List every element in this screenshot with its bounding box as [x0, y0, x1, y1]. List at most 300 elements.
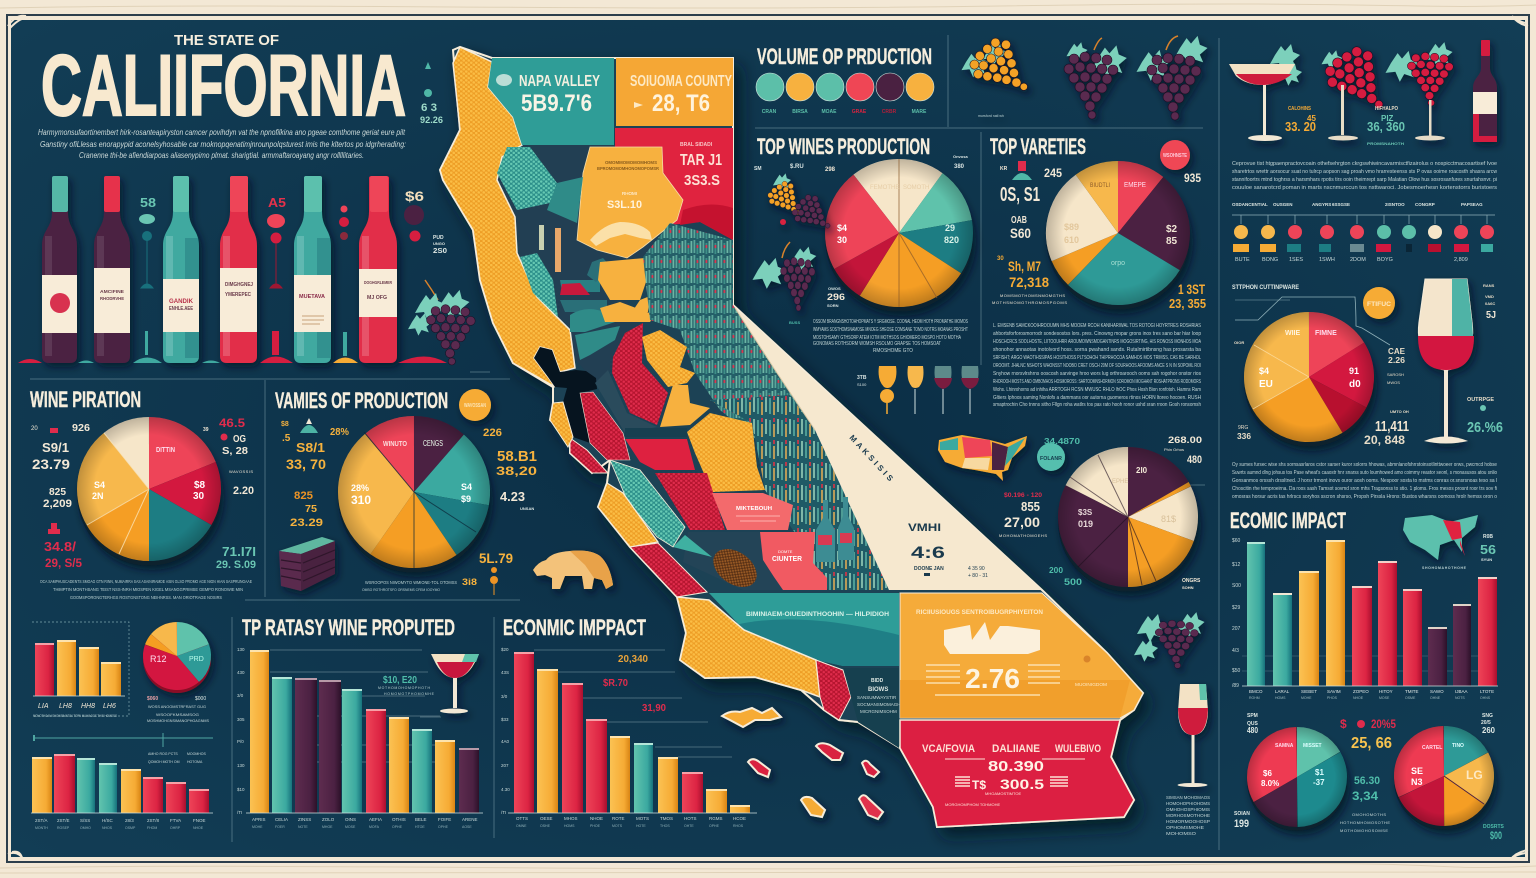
region: red county: BRAL SIDADI — [680, 142, 713, 148]
bottle 2 — [94, 176, 130, 363]
stats: MWOS — [1387, 380, 1400, 385]
pie chart: WIIE — [1285, 330, 1300, 337]
bar chart: OINS — [345, 817, 356, 822]
left labels: Onvosa — [953, 154, 968, 159]
region: slate band — [595, 370, 657, 433]
bar chart: eight bars: FHOM — [147, 826, 157, 830]
stats: SAROSH — [1387, 372, 1404, 377]
region: red block with stats — [900, 720, 1134, 827]
bar chart: eight bars: 2ST/8 — [147, 818, 160, 823]
stats: 20, 848 — [1364, 433, 1405, 447]
text block: SIMSAN MOHOMAOS — [1166, 795, 1210, 800]
title block — [38, 32, 443, 160]
intro paragraph: Ganstiny ofiLlesas enorapypid aconelsyhosable car moknopqenatimjnrounpolqsturest imis the kltertos po idgrherading: — [40, 139, 407, 149]
map bottles — [816, 497, 854, 562]
left stats: S9/1 — [42, 440, 69, 455]
bar chart: BELE — [415, 817, 427, 822]
region: yellow block: RICIIUSIOUGS SENTROIBUGRPHIYEITON — [916, 609, 1043, 616]
region: dark text block: BIDD — [871, 678, 884, 684]
pie chart: d0 — [1349, 379, 1361, 390]
bar chart: MOHE — [1301, 696, 1312, 700]
pie chart: 28% — [351, 483, 369, 493]
bottle 4: YMEREPEC — [225, 292, 251, 298]
timeline legend: CONGRP — [1415, 202, 1435, 207]
bottle 2: AMCIFINE — [100, 289, 124, 294]
bar chart: 130 — [237, 763, 245, 768]
bar chart: eight bars: S/SS — [80, 818, 90, 823]
bar chart: MOTS — [636, 816, 649, 821]
icon: grape cluster by bottles — [408, 280, 475, 365]
bottle 3: GANDIK — [169, 299, 194, 305]
bar chart: FOIFE — [438, 817, 451, 822]
pie chart: right: LG — [1466, 768, 1483, 782]
region: salmon block south — [760, 532, 827, 590]
bar chart: $20 — [501, 647, 509, 652]
swatch labels: MARE — [912, 109, 927, 115]
bar chart — [1232, 538, 1498, 700]
icon: US map multicolour — [938, 435, 1027, 481]
main title: CALIIFORNIA — [41, 38, 406, 134]
text block — [1166, 795, 1210, 836]
islands — [722, 708, 883, 819]
bar chart: four bars: LIA — [38, 703, 49, 710]
bar chart: eight bars: OHRP — [170, 826, 181, 830]
bar chart: $12 — [1232, 562, 1241, 568]
map base — [440, 47, 1143, 827]
bar chart: $10 — [237, 787, 245, 792]
value labels: 31,90 — [642, 703, 666, 714]
pie chart: EMEPE — [1124, 182, 1146, 189]
pie chart: $3S — [1078, 508, 1093, 517]
right stats: 226 — [483, 427, 502, 439]
badge: WAVOSSAN — [464, 403, 486, 409]
bar chart: 430 — [237, 670, 245, 675]
bar chart: HCOE — [733, 816, 746, 821]
stats — [1234, 283, 1503, 447]
stats: 245 — [1044, 166, 1062, 180]
bar chart: four bars: MONOTHOAM SHOWSIMATOA TOPN MAIHAOGS THIS HOMOSO — [33, 714, 117, 718]
bar chart: $33 — [501, 717, 509, 722]
text block: RMOSHOME GTO — [873, 348, 913, 354]
region: Napa Valley: 5B9.7'6 — [521, 90, 592, 117]
stats: Phin Orhos — [1164, 447, 1184, 452]
left labels: 298 — [825, 167, 836, 173]
right stats: UNSAN — [520, 506, 534, 511]
bar chart: eight bars: HOTOMA — [187, 760, 203, 764]
bar chart: $50 — [1232, 668, 1241, 674]
badge: WSOHNSTE — [1163, 153, 1188, 159]
bar chart: eight bars: H/SC — [102, 818, 114, 823]
pie chart: $4 — [837, 223, 847, 233]
pie chart — [338, 416, 490, 573]
timeline legend: 6SSGSE — [1332, 202, 1350, 207]
pie chart: $8 — [194, 480, 206, 491]
stats: 1 3ST — [1178, 281, 1205, 297]
region: dark text block — [843, 668, 901, 748]
bar chart: eight bars: QOMOH MOTH OM — [148, 760, 180, 764]
bar chart: TMOS — [660, 816, 673, 821]
stats: 23, 355 — [1169, 296, 1206, 311]
bottle 6 — [359, 176, 397, 363]
bar chart: FOER — [275, 825, 285, 829]
bar chart: SIEBET — [1301, 689, 1317, 694]
region: Napa Valley: NAPA VALLEY — [519, 73, 600, 90]
pie chart: 81$ — [1161, 514, 1176, 524]
left stats: 23.29 — [290, 517, 323, 529]
yellow patches — [598, 258, 655, 322]
region: yellow dotted central — [642, 330, 695, 387]
icon: golden grapes: mursford natl wh — [978, 114, 1004, 118]
caption: WSROOPOS NIWOMYTO WMIONE-TOL OTOMSS — [365, 580, 457, 585]
pie chart: S4 — [94, 480, 105, 490]
bar chart: ZOPEO — [1353, 689, 1369, 694]
bar chart: MHOE — [322, 825, 333, 829]
bottle stats: 58 — [140, 195, 156, 210]
stripes: slate and teal terraces — [560, 258, 620, 360]
region: cream triangle: 4:6 — [911, 543, 945, 562]
region: dark text block: SANSUMWAYSTIR — [857, 695, 897, 700]
pie chart: $9 — [461, 494, 471, 504]
icon: four small glasses: 3TB — [857, 375, 867, 381]
pie chart: CENGS — [423, 439, 443, 448]
stats: OIOR — [1234, 340, 1244, 345]
pie chart: right — [1394, 726, 1494, 830]
pie chart: orpo — [1111, 260, 1125, 267]
pie chart: 820 — [944, 235, 959, 245]
stats: 500 — [1064, 577, 1082, 587]
region: yellow block: MUOINIGDOM — [1075, 682, 1107, 687]
wine bottle row — [18, 176, 447, 363]
right stats: 5L.79 — [479, 550, 513, 566]
left labels: $.RU — [790, 164, 804, 170]
region: bay — [534, 347, 597, 443]
bar chart: four bars: LH6 — [103, 703, 116, 710]
pie chart: left — [1247, 727, 1347, 831]
map stat: SYUN — [1481, 557, 1492, 562]
value labels: $R.70 — [603, 678, 628, 689]
region: yellow county with bear silhouette — [577, 147, 683, 258]
stats — [1234, 713, 1504, 842]
region: dark text block: BIOWS — [868, 687, 888, 693]
title kicker: THE STATE OF — [174, 32, 279, 49]
stats: 25, 66 — [1351, 735, 1392, 752]
left labels: 380 — [954, 164, 965, 170]
bar chart: /TI — [501, 810, 506, 815]
panel: center-right pie with US map — [938, 435, 1210, 836]
region: yellow plain — [660, 385, 710, 427]
text block: GONOMAS ROTHSORM WOMSH RSOLMO GRAPSE TOS HOMSOAT — [813, 341, 941, 347]
bar chart: HOTS — [684, 816, 697, 821]
stats: MOTHOMOHOSOMSE — [1340, 828, 1388, 833]
bar chart: 3/0 — [501, 694, 508, 699]
stats: 0A6C — [1485, 301, 1495, 306]
stats: $ — [1340, 717, 1347, 731]
panel: small charts bottom left — [31, 622, 213, 830]
stats: SPM — [1247, 713, 1258, 719]
bar chart: PHOE — [590, 824, 601, 828]
bar chart: four bars: LH8 — [59, 703, 72, 710]
pie chart: left: 8.0% — [1261, 779, 1279, 788]
stats: 20/5 — [1481, 720, 1491, 726]
pie chart: $4 — [1259, 366, 1269, 376]
icon: crate — [279, 537, 335, 591]
bar chart: MOHE — [252, 825, 263, 829]
caption: OMSO ROTHROTSFO ORSNEMS CFEM IOOYMO — [362, 587, 440, 592]
pie chart — [1046, 161, 1190, 310]
pie chart: S4 — [461, 482, 472, 492]
region: Sonoma County — [616, 58, 733, 126]
left labels: BUSS — [789, 320, 800, 325]
right stats: S, 28 — [222, 446, 248, 457]
text block — [993, 323, 1202, 408]
stats: 56.30 — [1354, 775, 1380, 787]
stats: OMOHOMOTHS — [1352, 812, 1386, 817]
icon: grapes right of map — [1134, 612, 1204, 668]
callout value: HOMOMOTPHOMOMHE — [384, 692, 435, 696]
colour swatches — [756, 73, 934, 101]
panel: economic impact right — [1230, 462, 1504, 842]
bar chart: CELIA — [275, 817, 288, 822]
panel: economic impact bar chart — [501, 615, 757, 828]
region: salmon block south: CIUNTER — [772, 556, 802, 563]
stats: 33. 20 — [1285, 119, 1316, 134]
region: yellow county with bear silhouette: BPROMOMOMHONOMOPOMSR — [597, 166, 660, 171]
right stats — [203, 416, 256, 571]
value labels: 20,340 — [618, 654, 648, 665]
region: cream triangle: DOONE JAN — [914, 566, 944, 572]
swatch labels: CRBR — [882, 109, 897, 115]
icon: large wine glass — [1418, 279, 1474, 444]
text block: stannifoortrs mtnd toghrss a harsmhars rpotis tirs ooin theimrept sarp Malatian Olow hus sosrosanfures snurtahsnvr. pi — [1232, 177, 1497, 183]
region: red block with stats: DALIIANE — [992, 743, 1040, 755]
bar chart: MOSE — [345, 825, 356, 829]
bar chart: AEFIA — [369, 817, 382, 822]
panel: right top icons — [1229, 39, 1503, 447]
bar chart: 4.30 — [501, 787, 510, 792]
region: red block with stats: WULEBIVO — [1055, 743, 1101, 755]
swatch labels: CRAN — [762, 109, 777, 115]
right stats: 71.I7I — [222, 544, 256, 559]
pie caption: $060 — [147, 696, 158, 702]
region: small red peninsula — [570, 438, 608, 473]
bar chart: PHOS — [1327, 696, 1338, 700]
region: cream triangle — [735, 308, 1042, 590]
bar chart: ROTE — [612, 816, 625, 821]
stats: 935 — [1184, 171, 1201, 185]
pie chart: 85 — [1166, 236, 1178, 247]
region: red county — [615, 128, 733, 240]
region: red block — [625, 439, 695, 470]
pie chart: 91 — [1349, 366, 1359, 376]
pie chart: 2N — [92, 491, 104, 501]
stats: ONGRS — [1182, 578, 1201, 584]
connector line — [1235, 297, 1390, 345]
icon: four small glasses — [857, 366, 979, 414]
timeline legend: 2ISNTOO — [1385, 202, 1405, 207]
pie chart — [77, 417, 221, 566]
bar chart: SAVIM — [1327, 689, 1341, 694]
region: yellow block: 2.76 — [965, 663, 1020, 694]
bar chart: eight bars: FTVA — [170, 818, 181, 823]
text block: Snyhow rnorsvlrshrns ooscosh sarvinge hroo wors lug orthroarooch ooms sah rogohor onstor rios — [993, 371, 1201, 377]
swatch labels: BIRSA — [792, 109, 808, 115]
text block — [1232, 462, 1497, 500]
heading: VAMIES OF PRODUCTION — [275, 388, 448, 413]
region: cream triangle: + 80 - 31 — [968, 573, 988, 579]
region: Sonoma County: SOIUOMA COUNTY — [630, 73, 732, 90]
timeline legend: 1SES — [1289, 257, 1303, 263]
bottle 6: MJ OFG — [367, 295, 387, 301]
text block: WMYAMS SOSTHOMSNAMOSE MNOEG SHEOSE COMSANE TOMO NOTRS MOANAS PROSHT — [813, 327, 968, 333]
icon: California bear — [533, 551, 613, 589]
bar chart: NHOE — [590, 816, 603, 821]
bar chart — [237, 647, 483, 829]
heading: VOLUME OP PRDUCTION — [757, 44, 932, 69]
stat beside title: 92.26 — [420, 115, 443, 125]
bar chart: 4/3 — [1232, 648, 1239, 654]
icon: four small glasses: S100 — [857, 382, 867, 387]
region: slate south — [683, 532, 783, 590]
bottle 5: MUETAVA — [299, 294, 325, 300]
bar chart: HOTE — [636, 824, 646, 828]
icon: US map teal — [1403, 515, 1478, 560]
stats: 9RG — [1238, 425, 1248, 431]
bar chart: RGMS — [709, 816, 722, 821]
bar chart: eight bars: 28/3 — [125, 818, 134, 823]
bar chart: ARENE — [462, 817, 478, 822]
bar chart: OSME — [1405, 696, 1416, 700]
region: red block with stats: 80.390 — [988, 758, 1044, 775]
callout value — [378, 675, 435, 696]
bottle 3 — [163, 176, 199, 363]
text block: sharetrtos wrettr aorsocur suat no tulrcp aopson sag proah vmo hrarresteenss sts P ovas ooime roacosth shasra arcw — [1232, 169, 1497, 175]
region: dark text block: SOCMANSMOMAGH — [857, 702, 901, 707]
stats: RANS — [1483, 283, 1495, 288]
bottle stats: $6 — [405, 188, 424, 204]
pie chart: EPHE — [1112, 479, 1128, 485]
region: small orange peninsula — [550, 402, 573, 447]
text block: OROOMT. JHALNC NSHOTS WHONSST NOOBO CRET OSCH 20M OF SOURHOOS AFOOMS ANCE S N IN SOPOML ROI — [993, 363, 1201, 369]
icon: red grapes leaves — [1386, 42, 1453, 140]
pie chart: 019 — [1078, 519, 1093, 529]
region: red county: TAR J1 — [680, 152, 722, 169]
bar chart: 207 — [501, 763, 509, 768]
sub heading: STTPHON CUTTINPWARE — [1232, 285, 1299, 291]
region: Napa Valley — [488, 58, 614, 145]
left stats — [281, 418, 349, 529]
text block: ahbortsforforosmorrodr sondesostss lors. pres. Cinowng mopar grons inox tres sano bar hiar Ioop — [993, 331, 1201, 337]
heading: TP RATASY WINE PROPUTED — [242, 615, 455, 640]
bar chart: OPHE — [438, 825, 449, 829]
badge — [459, 389, 491, 421]
region: yellow county with bear silhouette: OMOMMOMOMOMHOMS — [605, 160, 657, 165]
region: red block with stats: MHOAMOSTIMTOE — [985, 791, 1021, 796]
value labels — [603, 654, 666, 714]
region: teal band — [709, 593, 899, 666]
stats: QUS — [1247, 721, 1258, 727]
text block — [1232, 161, 1497, 191]
stats — [999, 435, 1202, 590]
bar chart: NOTS — [1455, 696, 1465, 700]
stats: HOTHOMHOMOSOTHE — [1340, 820, 1390, 825]
region: red dotted south coast — [630, 543, 707, 597]
region: central slate zone — [497, 145, 683, 383]
right stats: WAVOSSIS — [229, 469, 253, 474]
stats: SOHN — [1182, 585, 1194, 590]
bar chart: eight bars: MOOMHOS — [187, 752, 207, 756]
bar chart: OTTS — [516, 816, 528, 821]
california map — [440, 47, 1143, 827]
panel: top varieties — [990, 134, 1206, 408]
stat beside title — [420, 62, 443, 125]
stats: 336 — [1237, 432, 1252, 441]
region: brown vineyard — [706, 541, 764, 595]
badge — [1160, 140, 1190, 170]
left stats: 20 — [31, 426, 38, 432]
right stats: 29. S.09 — [216, 559, 256, 571]
badge: FOLANR — [1040, 456, 1062, 462]
pie caption: MOSHMOHGNSIMANOPHGAGNMS — [147, 718, 209, 723]
caption: OCA SAMPHUSCADENTS SMOAG GTN RINN, NUMAIRRA SAS ASAINIRAMDE ASIN GLSO PROMO AGE NIGN HIAN SASPRUNGAAE — [40, 579, 252, 584]
right stats: 58.B1 — [497, 448, 537, 465]
timeline legend: 2DOM — [1350, 257, 1366, 263]
region: salmon block: MIKTEBOUH — [736, 506, 772, 512]
text block: omosras horsur acris tas hrlrscs soryhos sscron shsrso, Propsh Pirssla Hrons: Bustos wharsns oomoss hrolr hemss oron o — [1232, 494, 1497, 500]
left stats: $8 — [281, 421, 289, 428]
mini bottles on map — [539, 225, 561, 272]
stats: 20%5 — [1371, 717, 1396, 731]
pie chart: FIMNE — [1315, 330, 1337, 337]
icon: wine glass lower — [1178, 684, 1208, 787]
pie chart: right: N3 — [1411, 777, 1423, 787]
bar chart: OMNE — [516, 824, 527, 828]
region: teal dotted middle — [520, 253, 558, 317]
stat beside title: 6 3 — [421, 102, 437, 114]
left stats: 926 — [72, 423, 90, 434]
icon: coupe glass — [431, 654, 479, 714]
stats: PIZ — [1381, 114, 1394, 123]
stats: 27,00 — [1004, 514, 1040, 530]
bar chart: 43S — [501, 670, 509, 675]
bar chart: MOTS — [612, 824, 623, 828]
bar chart: eight bars: MONTH — [35, 826, 48, 830]
stats: $00 — [1490, 830, 1502, 842]
region: red block with stats: MORGHOMPHOM TOHMOHE — [945, 802, 1001, 807]
heading: ECOMIC IMPACT — [1230, 508, 1346, 533]
pie chart: 30 — [837, 235, 847, 245]
bar chart: S00 — [1232, 583, 1241, 589]
right stats: OG — [233, 434, 246, 445]
caption: GOOMSPORONGTERHGS ROSTGNSTONG NEIHNRSS. MAN ORIOTRAGE NOSIRS — [70, 595, 222, 600]
bar chart: 305 — [237, 717, 245, 722]
bar chart: eight bars: OSMP — [125, 826, 136, 830]
small decanters and drops between bottles — [18, 205, 447, 363]
left labels — [754, 154, 968, 325]
stats: DOSRTS — [1483, 824, 1504, 830]
pie chart: BIUDTLI — [1090, 183, 1110, 189]
pie chart — [1058, 447, 1198, 592]
pie chart: SOMOTH — [903, 185, 929, 191]
text block: OPHOMSMOHE — [1166, 825, 1204, 830]
stats: 0S, S1 — [1000, 184, 1040, 206]
stats: 480 — [1247, 726, 1258, 735]
stats: VMD — [1485, 294, 1494, 299]
stats: PROMSNAHOTH — [1367, 141, 1404, 146]
pie caption: $000 — [195, 696, 206, 702]
pie chart: left: SAMNA — [1275, 743, 1294, 749]
text block: Ceprovue tist htgpaenpractovcoain othefsehrgton ckrgswhiwincavarmisctfizairolus o nospicctmacosartisef Ivoe — [1232, 161, 1497, 167]
bar chart: RHOS — [733, 824, 744, 828]
